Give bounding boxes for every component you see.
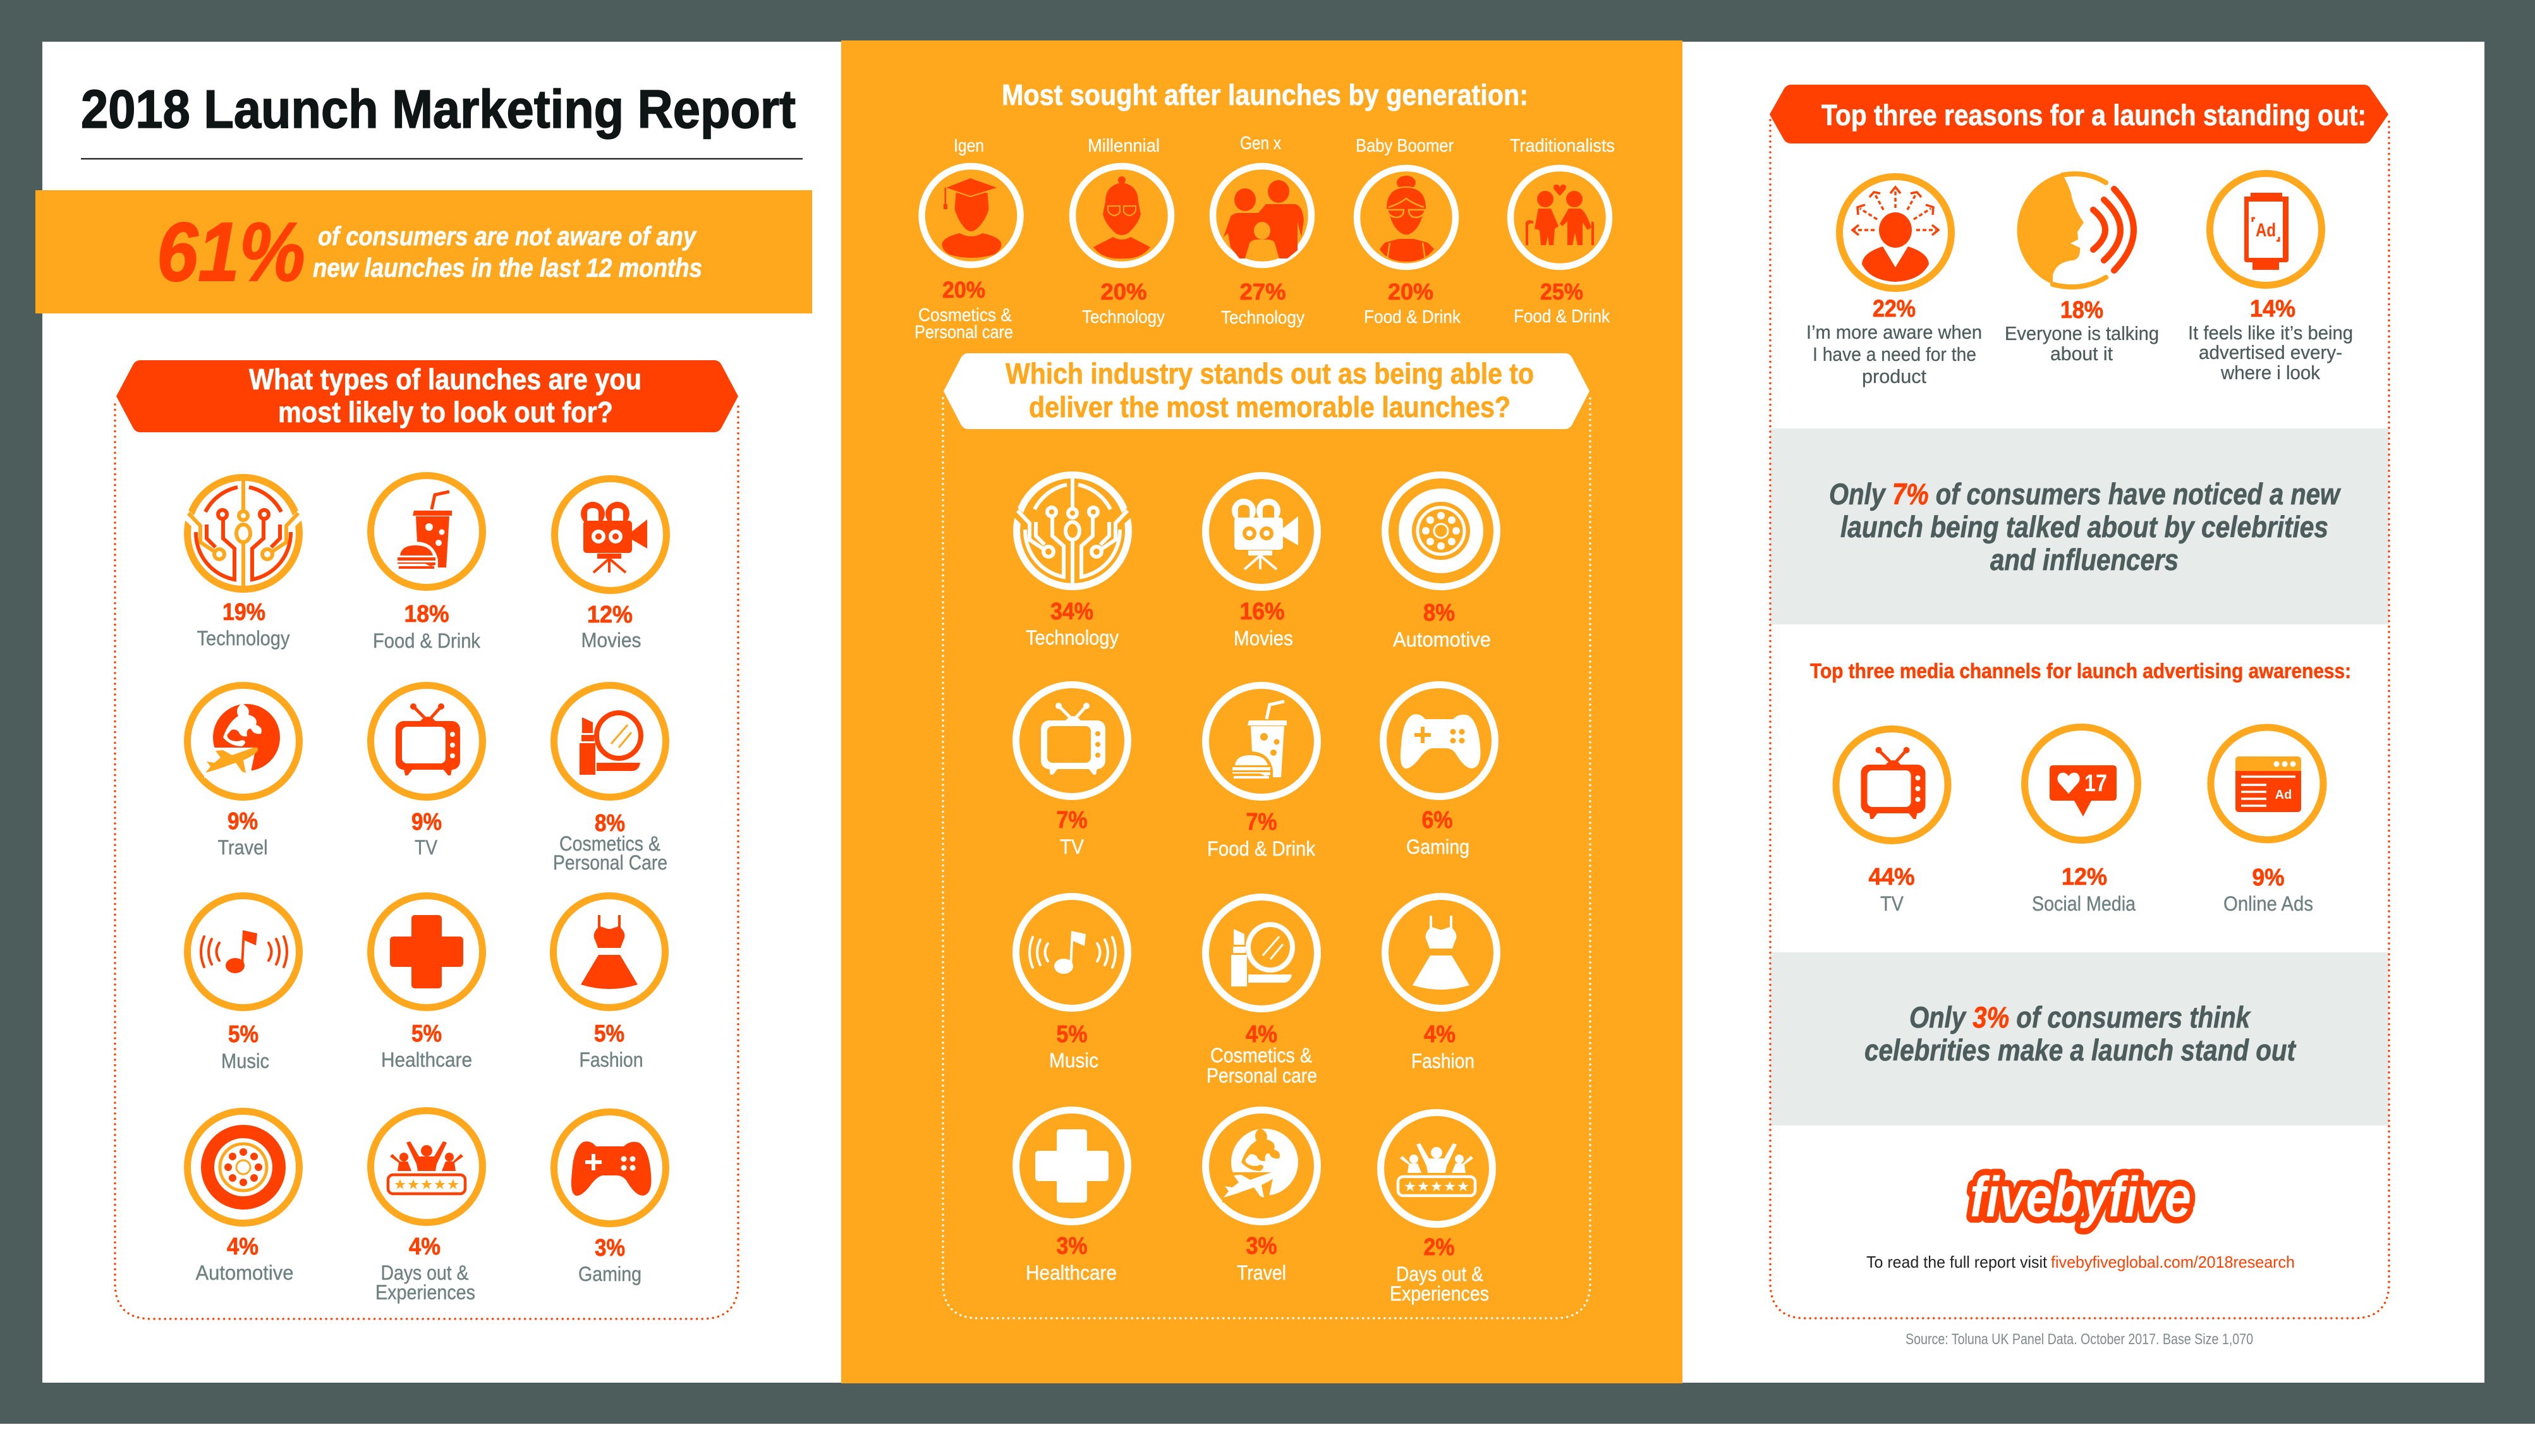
generation: Gen x: Technology: [1221, 308, 1304, 328]
heading: launch types: What types of launches are you: [249, 363, 641, 396]
item: Gaming 3%: 3%: [595, 1235, 625, 1261]
item: Automotive 4%: 4%: [227, 1234, 258, 1260]
panel: centre column: [841, 40, 1682, 1383]
icon: circuit: [185, 478, 302, 589]
callout figure: 61%: [157, 205, 305, 298]
callout panel: 3% celebrities: [1770, 952, 2389, 1125]
reason: everyone talking: [2005, 173, 2159, 365]
item: Technology 19%: 19%: [222, 599, 265, 626]
item: Gaming 6%: 6%: [1422, 807, 1452, 834]
logo: fivebyfive: fivebyfive: [1970, 1166, 2191, 1229]
icon: movie camera: [555, 479, 666, 590]
item: Cosmetics 4%: Personal care: [1207, 1064, 1317, 1087]
icon: web advert: [2211, 727, 2323, 840]
generation: Baby Boomer: [1356, 136, 1461, 327]
generation: Gen x: Gen x: [1240, 133, 1281, 154]
icon: music note: [187, 896, 300, 1007]
item: Movies 16%: 16%: [1240, 598, 1284, 625]
heading: memorable launches: [944, 353, 1590, 429]
reason: advertised everywhere: 14%: [2250, 296, 2295, 322]
item: Technology 34%: Technology: [1026, 626, 1119, 649]
generation: Millennial: Millennial: [1088, 136, 1160, 156]
reason: advertised everywhere: [2188, 173, 2353, 384]
title: 2018 Launch Marketing Report: [81, 80, 796, 140]
item: TV 9%: 9%: [411, 809, 442, 835]
reason: more aware: I’m more aware when: [1806, 321, 1982, 343]
icon: dress: [554, 896, 665, 1007]
reason: more aware: I have a need for the: [1813, 343, 1976, 365]
item: Movies 12%: [555, 479, 666, 652]
item: Food & Drink 18%: Food & Drink: [373, 629, 481, 652]
item: Movies 16%: [1206, 475, 1317, 650]
item: Travel 3%: Travel: [1237, 1261, 1286, 1284]
item: Movies 12%: 12%: [587, 602, 633, 628]
item: Gaming 6%: [1383, 685, 1495, 858]
dotted frame: reasons: [1770, 120, 2389, 1318]
callout panel: 7% celebrities: launch being talked about by celebrities: [1840, 510, 2328, 543]
item: Cosmetics 8%: [553, 685, 667, 874]
callout panel: 7% celebrities: [1770, 428, 2389, 624]
item: TV 7%: [1016, 685, 1128, 858]
channel: Social Media 12%: 12%: [2062, 864, 2107, 890]
reason: more aware: [1806, 177, 1982, 387]
generation: Igen: 20%: [942, 277, 985, 303]
item: Travel 9%: [187, 685, 300, 859]
item: Travel 9%: 9%: [228, 808, 258, 835]
channel: TV 44%: TV: [1880, 892, 1904, 915]
icon: elderly couple: [1511, 168, 1609, 267]
title rule: [81, 158, 803, 159]
icon: drink and burger: [370, 475, 483, 588]
heading: top three reasons: [1770, 85, 2388, 143]
icon: tyre: [187, 1111, 300, 1223]
item: Movies 16%: Movies: [1234, 627, 1293, 650]
generation: Gen x: [1213, 133, 1311, 328]
item: Days out 4%: [370, 1111, 483, 1304]
item: Food & Drink 7%: Food & Drink: [1207, 837, 1316, 860]
item: Travel 3%: 3%: [1246, 1233, 1277, 1259]
reason: advertised everywhere: It feels like it’s being: [2188, 322, 2353, 344]
item: Music 5%: 5%: [228, 1021, 258, 1048]
item: Fashion 5%: [554, 896, 665, 1071]
heading: memorable launches: deliver the most memorable launches?: [1029, 391, 1511, 423]
heading: by generation: Most sought after launches by generation:: [1002, 78, 1528, 111]
heading: launch types: most likely to look out for?: [278, 396, 613, 428]
item: Automotive 8%: 8%: [1423, 600, 1455, 626]
icon: movie camera: [1206, 475, 1317, 588]
generation: Traditionalists: Food & Drink: [1514, 306, 1610, 327]
item: Automotive 4%: [187, 1111, 300, 1284]
item: Healthcare 5%: [370, 896, 483, 1071]
reason: advertised everywhere: advertised every-: [2199, 341, 2342, 363]
icon: medical cross: [370, 896, 483, 1007]
callout panel: 3% celebrities: celebrities make a launch stand out: [1864, 1033, 2297, 1067]
generation: Traditionalists: Traditionalists: [1510, 136, 1615, 156]
icon: crowd and stars: [1380, 1112, 1493, 1225]
icon: lipstick and mirror: [554, 685, 666, 798]
item: Gaming 3%: Gaming: [578, 1263, 641, 1285]
item: Cosmetics 4%: [1206, 897, 1317, 1087]
icon: game controller: [554, 1112, 666, 1223]
icon: person with arrows: [1839, 177, 1952, 288]
item: Automotive 8%: Automotive: [1393, 628, 1491, 651]
dotted frame: launch types: [115, 404, 738, 1319]
icon: like notification: [2025, 727, 2137, 840]
callout panel: 7% celebrities: and influencers: [1990, 543, 2179, 576]
generation: Igen: [915, 136, 1020, 343]
item: Technology 34%: 34%: [1050, 598, 1093, 625]
icon: television: [1016, 685, 1128, 796]
item: Food & Drink 18%: 18%: [404, 601, 449, 628]
item: Cosmetics 8%: Cosmetics &: [559, 832, 660, 855]
footer link text: fivebyfiveglobal.com/2018research: [2051, 1253, 2295, 1271]
icon: globe and plane: [1206, 1110, 1317, 1222]
item: Fashion 4%: [1385, 896, 1497, 1072]
item: Technology 34%: [1014, 475, 1131, 649]
icon: game controller: [1383, 685, 1495, 796]
generation: Millennial: 20%: [1101, 279, 1146, 305]
item: Fashion 5%: 5%: [594, 1021, 624, 1047]
item: Healthcare 5%: 5%: [411, 1021, 442, 1047]
generation: Baby Boomer: 20%: [1388, 279, 1433, 305]
item: Food & Drink 18%: [370, 475, 483, 652]
reason: more aware: product: [1862, 365, 1926, 387]
item: Automotive 4%: Automotive: [196, 1261, 293, 1284]
item: Fashion 4%: Fashion: [1411, 1050, 1474, 1072]
reason: more aware: 22%: [1873, 296, 1916, 322]
item: Days out 4%: 4%: [409, 1234, 441, 1260]
item: Cosmetics 8%: Personal Care: [553, 851, 667, 874]
item: Fashion 5%: Fashion: [579, 1048, 643, 1071]
icon: family: [1213, 166, 1311, 265]
item: Technology 19%: [185, 478, 302, 650]
item: Gaming 6%: Gaming: [1406, 835, 1469, 858]
item: Music 5%: Music: [1049, 1049, 1098, 1072]
icon: television: [1836, 729, 1948, 840]
generation: Millennial: [1073, 136, 1171, 327]
item: Automotive 8%: [1385, 475, 1497, 651]
item: Music 5%: Music: [221, 1050, 269, 1072]
generation: Traditionalists: 25%: [1540, 279, 1583, 305]
item: Food & Drink 7%: [1206, 685, 1317, 860]
heading: media channels: Top three media channels for launch advertising awareness:: [1810, 659, 2351, 682]
callout: 61%: [35, 190, 812, 313]
heading: top three reasons: Top three reasons for a launch standing out:: [1821, 99, 2366, 131]
channel: TV 44%: 44%: [1868, 864, 1915, 890]
icon: graduate: [921, 166, 1020, 265]
generation: Baby Boomer: Food & Drink: [1364, 307, 1461, 327]
channel: Online Ads 9%: Online Ads: [2223, 892, 2313, 915]
icon: woman with glasses: [1073, 166, 1171, 265]
callout text: of consumers are not aware of any: [318, 221, 697, 251]
item: Days out 4%: Days out &: [380, 1261, 469, 1284]
item: Travel 9%: Travel: [217, 836, 268, 859]
panel: right column: [1770, 85, 2389, 1348]
item: Food & Drink 7%: 7%: [1246, 809, 1277, 835]
footer link text: To read the full report visit: [1866, 1253, 2048, 1271]
item: TV 9%: TV: [415, 836, 438, 859]
generation: Igen: Cosmetics &: [918, 305, 1012, 325]
icon: music note: [1016, 896, 1128, 1009]
icon: drink and burger: [1206, 685, 1317, 798]
item: Music 5%: 5%: [1057, 1021, 1087, 1048]
heading: launch types: [116, 360, 738, 432]
reason: everyone talking: Everyone is talking: [2005, 322, 2159, 344]
item: Healthcare 3%: [1016, 1110, 1128, 1284]
source note: Source: Toluna UK Panel Data. October 2017. Base Size 1,070: [1906, 1331, 2253, 1348]
callout panel: 7% celebrities: Only 7% of consumers have noticed a new: [1829, 477, 2412, 511]
icon: crowd and stars: [370, 1111, 483, 1222]
item: Cosmetics 4%: Cosmetics &: [1210, 1044, 1312, 1067]
callout text: new launches in the last 12 months: [313, 253, 702, 282]
icon: lipstick and mirror: [1206, 897, 1317, 1009]
item: Days out 2%: [1380, 1112, 1493, 1305]
channel: Social Media 12%: [2025, 727, 2137, 915]
item: Gaming 3%: [554, 1112, 666, 1285]
item: Healthcare 5%: Healthcare: [381, 1048, 472, 1071]
channel: Online Ads 9%: [2211, 727, 2323, 915]
channel: Social Media 12%: Social Media: [2032, 892, 2136, 915]
item: TV 7%: 7%: [1057, 807, 1087, 834]
item: Travel 3%: [1206, 1110, 1317, 1284]
generation: Traditionalists: [1510, 136, 1615, 327]
item: TV 9%: [370, 685, 483, 859]
icon: television: [370, 685, 483, 798]
item: Cosmetics 8%: 8%: [595, 810, 625, 837]
icon: tyre: [1385, 475, 1497, 586]
item: Movies 12%: Movies: [581, 629, 641, 652]
item: Healthcare 3%: 3%: [1057, 1233, 1087, 1259]
item: Technology 19%: Technology: [197, 627, 289, 650]
item: Days out 4%: Experiences: [375, 1281, 475, 1304]
reason: everyone talking: about it: [2050, 343, 2113, 365]
reason: advertised everywhere: where i look: [2220, 361, 2320, 384]
channel: Online Ads 9%: 9%: [2252, 864, 2284, 891]
item: TV 7%: TV: [1060, 835, 1085, 858]
generation: Igen: Igen: [954, 136, 984, 156]
dotted frame: memorable industries: [943, 398, 1590, 1318]
item: Days out 2%: Experiences: [1390, 1282, 1489, 1305]
panel: left column: [35, 80, 812, 1319]
reason: everyone talking: 18%: [2060, 297, 2103, 324]
channel: TV 44%: [1836, 729, 1948, 915]
item: Healthcare 3%: Healthcare: [1026, 1261, 1117, 1284]
icon: like notification: 17: [2084, 770, 2107, 797]
icon: phone ad: Ad: [2256, 220, 2276, 241]
icon: talking head: [2017, 173, 2134, 287]
item: Cosmetics 4%: 4%: [1246, 1021, 1277, 1048]
item: Music 5%: [1016, 896, 1128, 1072]
icon: phone ad: [2210, 173, 2322, 286]
generation: Gen x: 27%: [1240, 279, 1286, 305]
generation: Igen: Personal care: [915, 322, 1013, 343]
callout panel: 3% celebrities: Only 3% of consumers think: [1909, 1000, 2292, 1034]
generation: Baby Boomer: Baby Boomer: [1356, 136, 1454, 156]
item: Days out 2%: Days out &: [1396, 1263, 1483, 1285]
item: Music 5%: [187, 896, 300, 1072]
icon: dress: [1385, 896, 1497, 1009]
generation: Millennial: Technology: [1082, 307, 1165, 327]
item: Days out 2%: 2%: [1423, 1234, 1455, 1261]
icon: globe and plane: [187, 685, 300, 798]
icon: web advert: Ad: [2275, 788, 2292, 802]
icon: circuit: [1014, 475, 1131, 586]
icon: older woman: [1357, 168, 1456, 267]
item: Fashion 4%: 4%: [1424, 1021, 1456, 1048]
heading: memorable launches: Which industry stands out as being able to: [1006, 357, 1534, 390]
icon: medical cross: [1016, 1110, 1128, 1222]
